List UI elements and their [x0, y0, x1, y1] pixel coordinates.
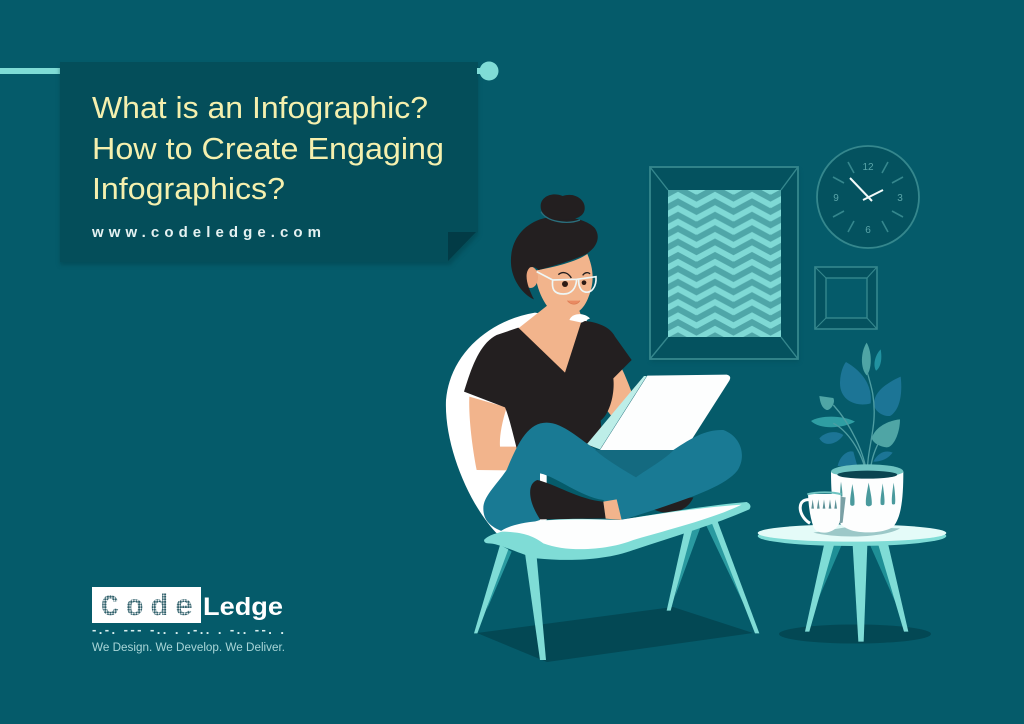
cup droplets	[811, 499, 837, 509]
clock numeral 12: 12	[862, 162, 874, 173]
title line 1: What is an Infographic?	[92, 90, 428, 125]
second shoe	[652, 497, 693, 513]
panel: title banner	[60, 62, 478, 265]
bare foot	[603, 499, 622, 520]
hair bun	[541, 194, 585, 220]
top leaves	[862, 343, 871, 375]
neck and chest	[518, 303, 583, 374]
laptop	[587, 375, 730, 450]
ear	[523, 267, 538, 288]
logo tagline: We Design. We Develop. We Deliver.	[92, 642, 285, 654]
table-top shadow	[813, 527, 900, 536]
logo morse line: -.-. --- -.. . .-.. . -.. --. .	[92, 622, 284, 637]
chair legs	[474, 521, 759, 660]
clock hands	[850, 178, 883, 201]
hair band	[541, 212, 580, 222]
clock numeral 6: 6	[865, 225, 871, 236]
right arm	[607, 368, 633, 421]
large blue leaves	[840, 362, 871, 404]
glasses	[537, 272, 596, 294]
chair shadow	[477, 607, 753, 662]
clock numeral 3: 3	[897, 193, 903, 204]
plant	[811, 343, 901, 475]
logo word Code: Code	[101, 591, 193, 625]
logo	[92, 587, 285, 654]
title line 3: Infographics?	[92, 171, 285, 206]
side table	[758, 524, 946, 642]
chair tip near shoulder	[569, 314, 590, 323]
flower pot	[831, 464, 903, 532]
face	[535, 254, 593, 316]
coffee cup	[800, 492, 846, 533]
left arm	[469, 397, 527, 471]
chair backrest	[446, 313, 587, 535]
chevron artwork	[668, 190, 781, 337]
logo word Ledge: Ledge	[203, 593, 283, 621]
table shadow	[779, 624, 931, 644]
clock numeral 9: 9	[833, 193, 839, 204]
large picture frame	[650, 167, 799, 362]
mouth	[567, 301, 580, 304]
pot droplets	[840, 482, 895, 506]
lower back leaves	[838, 451, 857, 466]
wall clock	[817, 146, 919, 248]
hair	[511, 217, 598, 299]
eye and brow	[558, 273, 590, 287]
title line 2: How to Create Engaging	[92, 131, 444, 166]
woman figure	[464, 194, 742, 532]
trousers shaded lap	[595, 450, 674, 477]
logo white box	[92, 587, 201, 623]
chair seat	[484, 502, 751, 560]
trousers	[483, 423, 742, 532]
small picture frame	[815, 267, 877, 329]
pin dot	[477, 62, 498, 80]
t-shirt	[464, 321, 632, 448]
stems	[833, 370, 878, 475]
website url: www.codeledge.com	[91, 224, 321, 241]
side leaves	[872, 419, 900, 447]
folded corner	[448, 232, 476, 261]
first shoe	[530, 480, 606, 519]
ribbon stripe	[0, 68, 62, 74]
